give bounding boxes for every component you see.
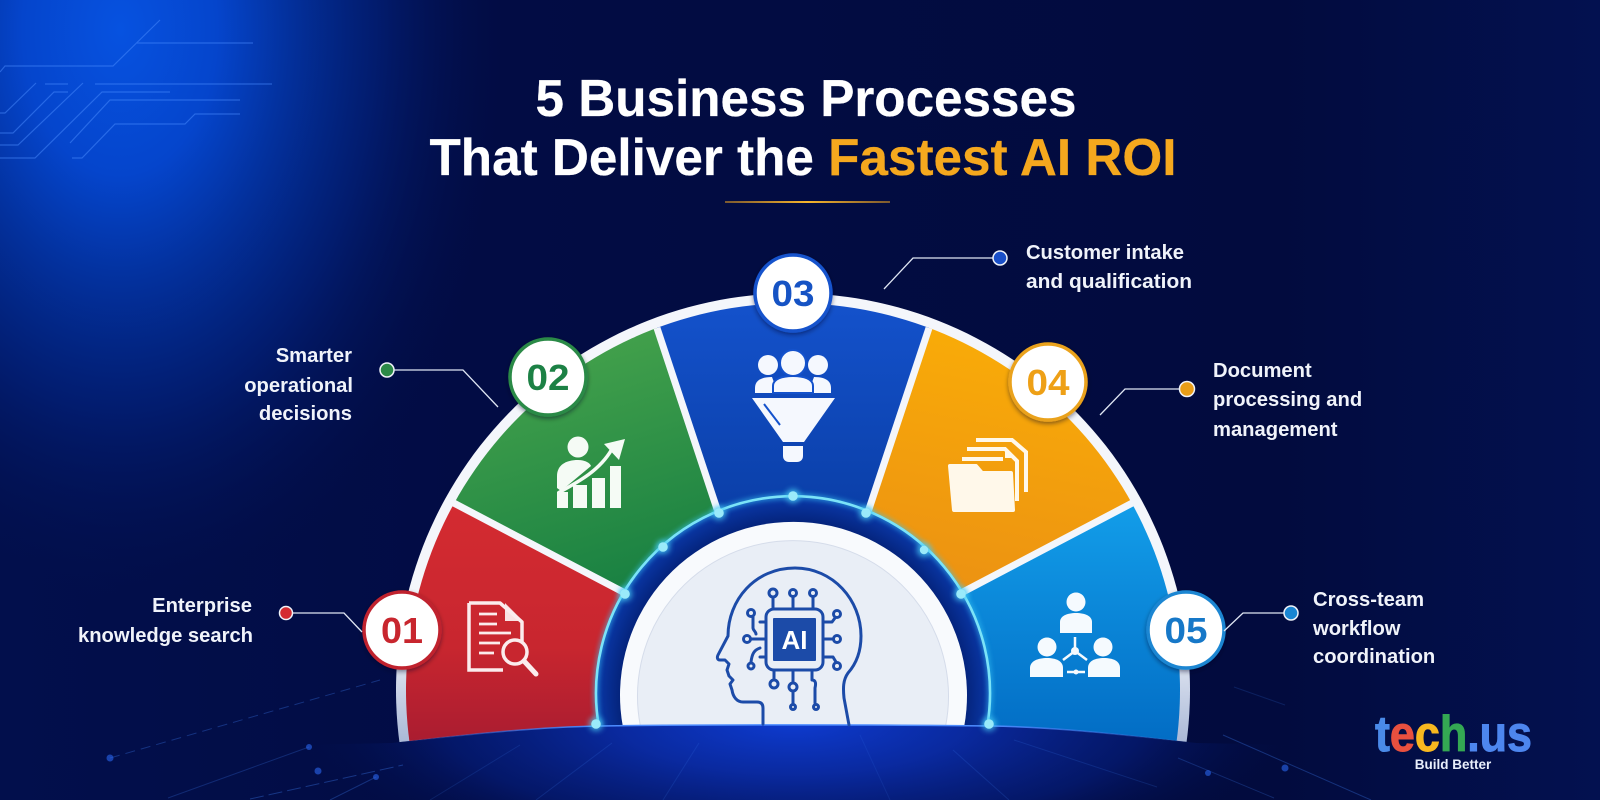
hub inner disk [637, 541, 948, 728]
badge 03: 03 [772, 273, 814, 314]
head outline [717, 568, 861, 725]
callout 02: decisions [259, 403, 352, 425]
segment 05 light blue [966, 506, 1180, 741]
callout 02: operational [244, 375, 353, 397]
badge 05: 05 [1164, 610, 1208, 651]
callout 04 [1100, 360, 1362, 441]
icon: document search [469, 603, 536, 674]
chip core [773, 618, 816, 661]
callout 01: knowledge search [78, 625, 253, 647]
callout 02 [244, 345, 498, 425]
title: That Deliver the Fastest AI ROI [430, 129, 1176, 187]
badge 05 [1148, 592, 1224, 668]
semicircle diagram [396, 295, 1190, 742]
logo: tech.us [1375, 706, 1532, 762]
callout 02: Smarter [276, 345, 352, 367]
callout 01: Enterprise [152, 595, 252, 617]
chip frame [766, 609, 823, 670]
title underline [725, 201, 890, 203]
callout 03 [884, 242, 1192, 293]
callout 05: coordination [1313, 646, 1435, 668]
circuit lines top left [0, 20, 272, 158]
badge 03 [755, 255, 831, 331]
icon: folder with documents [950, 440, 1026, 510]
hub dark band [596, 496, 990, 728]
segment 04 orange [872, 328, 1130, 589]
chip label: AI [782, 625, 808, 655]
circuit traces [744, 589, 840, 710]
hub glowing nodes [589, 489, 996, 731]
ground [106, 680, 1371, 800]
badge 01 [364, 592, 440, 668]
segment 03 blue [657, 305, 929, 508]
title [430, 70, 1176, 187]
callout 05: workflow [1312, 618, 1401, 640]
hub white ring [620, 522, 967, 728]
floor nodes [106, 744, 1288, 780]
icon: AI head [717, 568, 861, 725]
hub cyan arc glow [596, 496, 990, 728]
badge 04 [1010, 344, 1086, 420]
icon: funnel with people [752, 350, 835, 462]
callout 04: Document [1213, 360, 1312, 382]
callout 03: Customer intake [1026, 242, 1184, 264]
title: 5 Business Processes [536, 70, 1076, 128]
badge 02 [510, 339, 586, 415]
callout 05 [1224, 589, 1435, 668]
logo: Build Better [1415, 757, 1492, 772]
segment 02 green [456, 328, 714, 589]
badge 04: 04 [1026, 362, 1070, 403]
floor lines [110, 680, 1371, 800]
badge 01: 01 [381, 610, 423, 651]
badge 02: 02 [526, 357, 570, 398]
hub cyan arc [596, 496, 990, 728]
callout 01 [78, 595, 362, 647]
icon: team network [1030, 592, 1120, 677]
icon: person with growth chart [557, 436, 625, 508]
segment dividers [448, 328, 1138, 593]
callout 03: and qualification [1026, 271, 1192, 293]
segment 01 red [406, 506, 620, 741]
callout 05: Cross-team [1313, 589, 1424, 611]
outer white ring [396, 293, 1190, 745]
callout 04: management [1213, 419, 1338, 441]
callout 04: processing and [1213, 389, 1362, 411]
